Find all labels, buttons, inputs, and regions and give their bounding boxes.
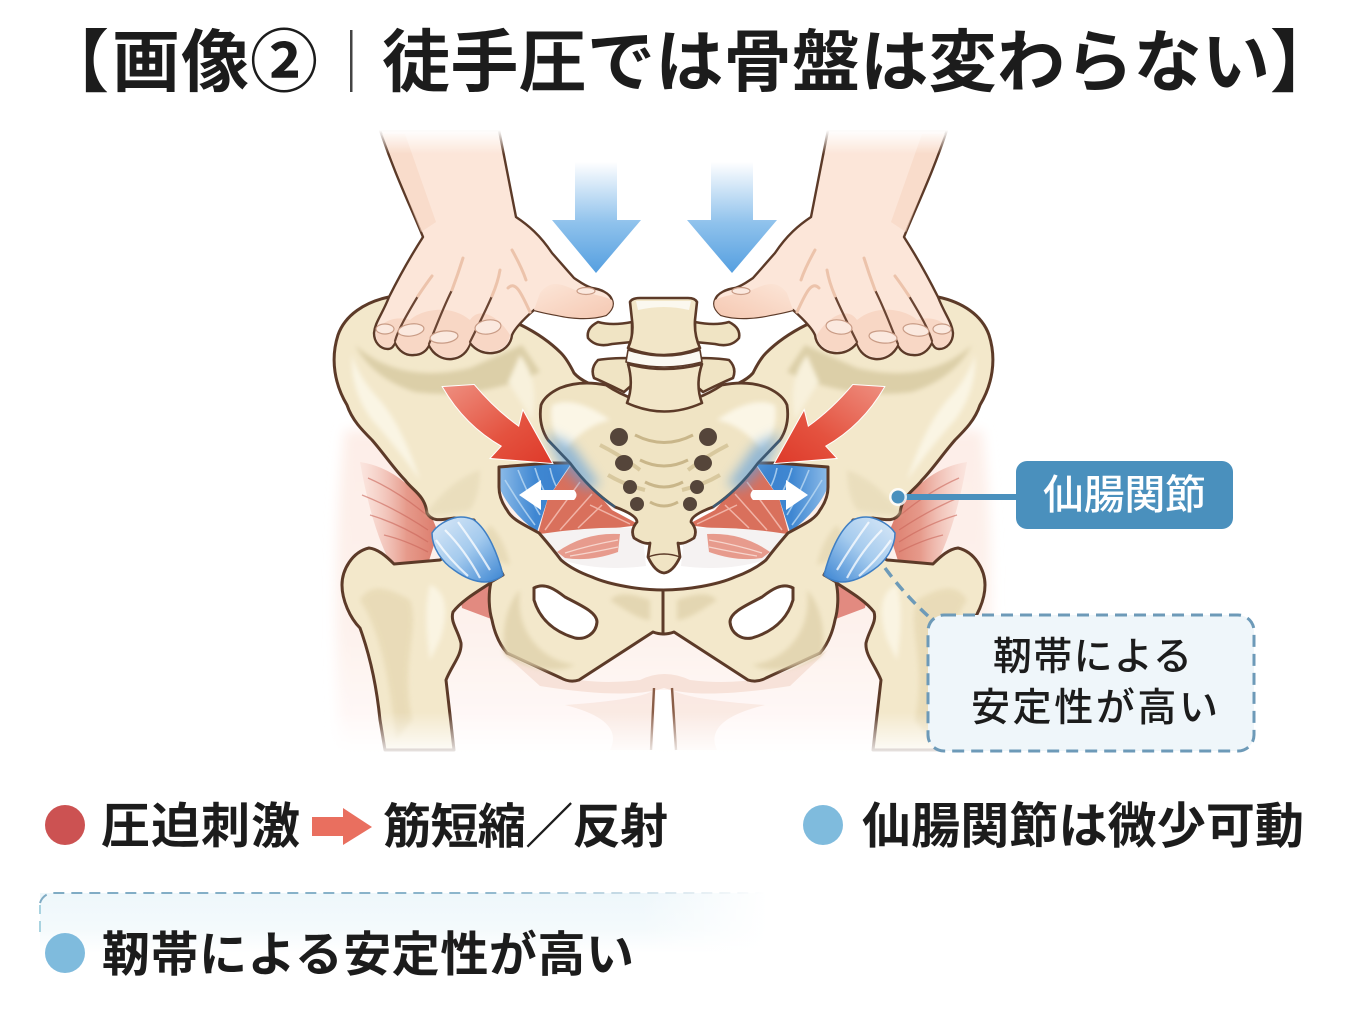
arrow: left red compression [443,385,552,463]
arrow: right red compression [775,385,884,463]
title [41,25,1338,101]
callout: sacroiliac joint label [889,461,1233,529]
bottom fade [325,712,1005,758]
sacral foramina [610,428,717,511]
arrow: right downward press [687,162,777,273]
legend: sacroiliac joint micro-motion: 仙腸関節は微少可動 [862,800,1304,854]
legend: compression stimulus: 圧迫刺激 [101,800,300,854]
blue joint wash [545,432,782,490]
title: 徒手圧では骨盤は変わらない [382,25,1270,101]
legend: compression stimulus [45,800,668,854]
sacrum [540,383,788,573]
title: 【 [41,25,109,101]
legend panel: ligament stability [40,890,768,982]
callout: ligament stability: 安定性が高い [971,687,1218,730]
legend: compression stimulus: 筋短縮／反射 [383,801,668,854]
title: 】 [1270,25,1338,101]
callout: ligament stability: 靭帯による [993,636,1192,679]
right half: femur, ilium, hand [663,124,993,750]
skin background [336,430,991,750]
callout: ligament stability [885,568,1254,751]
arrow: right white micro-motion [750,480,808,510]
callout: sacroiliac joint label: 仙腸関節 [1043,472,1206,518]
left half: femur, ilium, hand [334,124,664,750]
lumbar vertebrae [588,298,739,412]
arrow: left downward press [552,162,641,273]
legend panel: ligament stability: 靭帯による安定性が高い [102,929,634,982]
title: 画像② [112,25,318,101]
anatomy illustration: pelvis with hands [325,124,1005,758]
crotch and thigh lines [500,650,828,750]
arrow: left white micro-motion [519,480,576,510]
